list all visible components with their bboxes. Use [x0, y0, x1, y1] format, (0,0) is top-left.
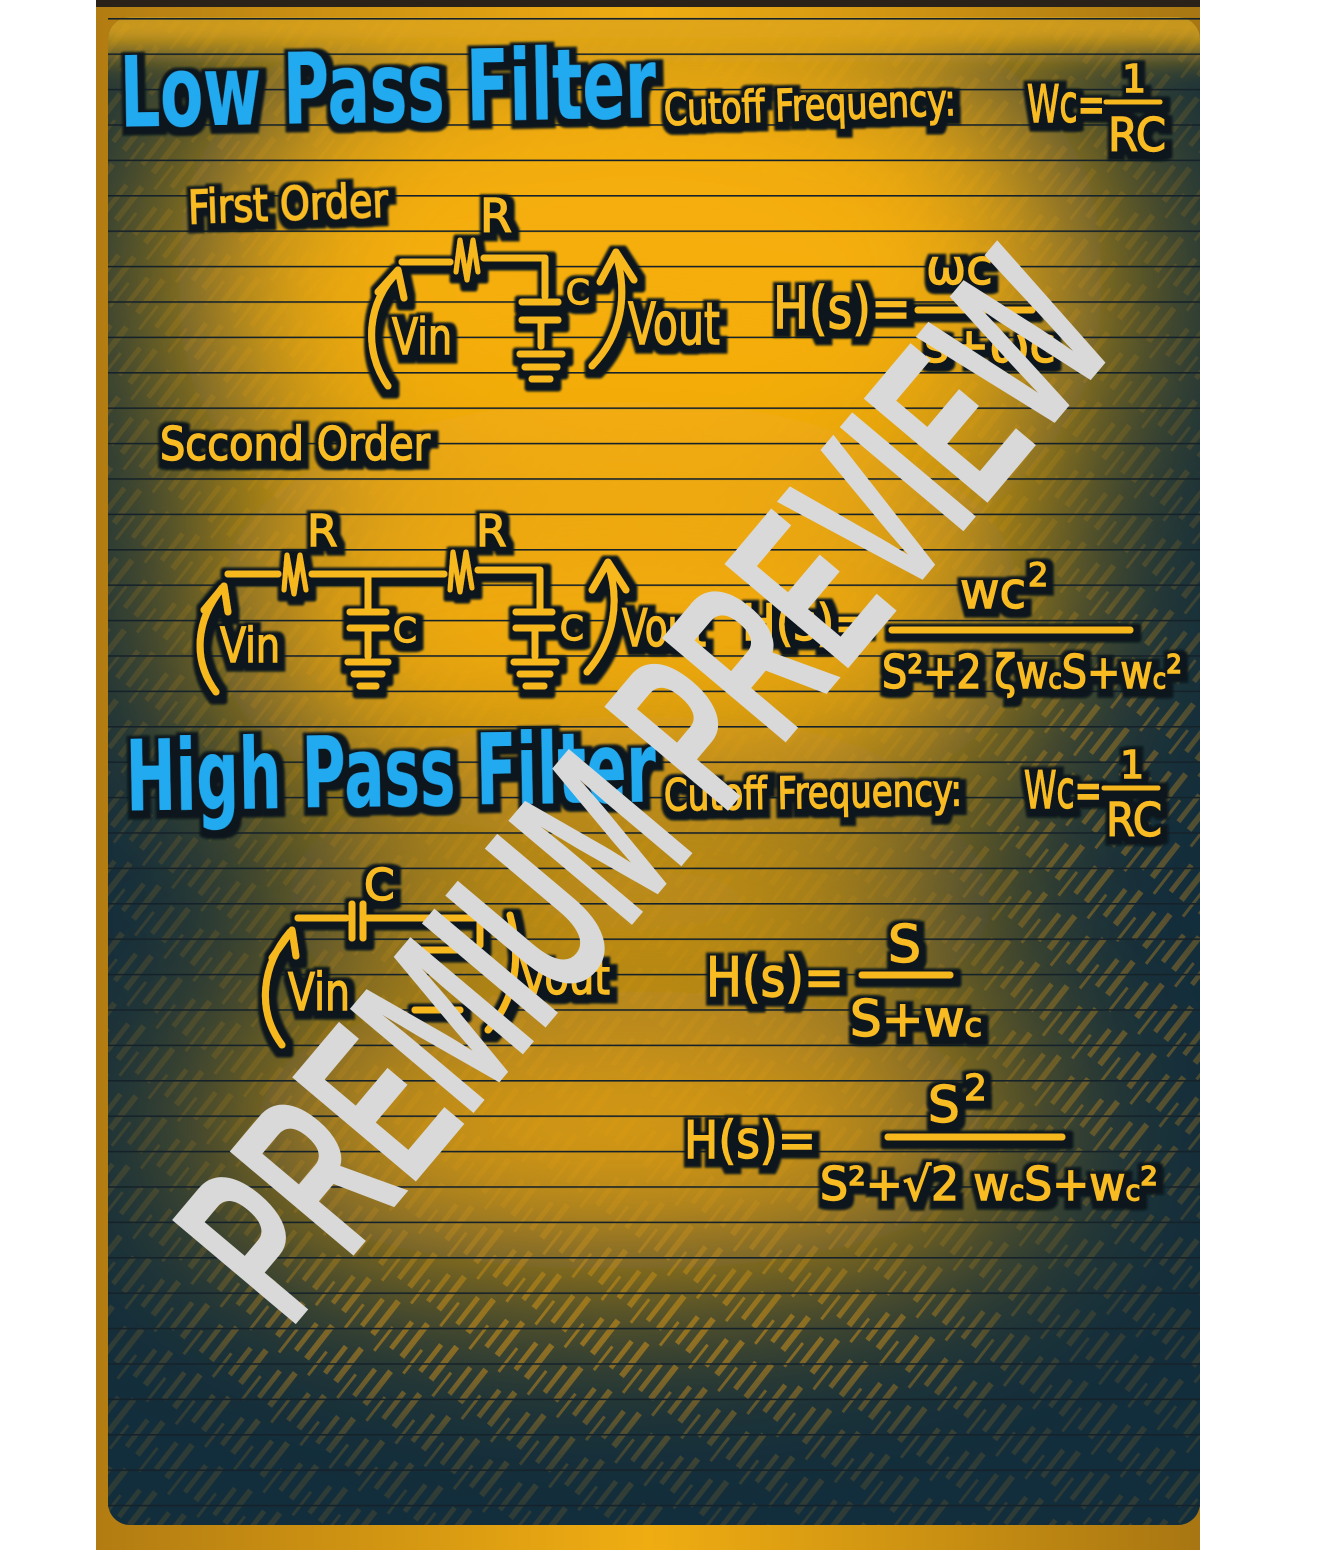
transfer function: first order low pass: H(s)= [773, 274, 911, 342]
cutoff frequency formula: high pass [664, 743, 1162, 847]
cutoff frequency formula: high pass: Wc= [1024, 761, 1102, 821]
transfer function: second order low pass: 2 [1028, 556, 1048, 594]
transfer function: first order low pass [773, 240, 1056, 374]
transfer function: second order high pass: H(s)= [684, 1111, 816, 1171]
circuit: second order low pass: R [307, 506, 338, 557]
cutoff frequency formula: low pass: RC [1108, 108, 1166, 162]
transfer function: first order low pass: s+ωc [924, 318, 1056, 374]
circuit: first order low pass: Vout [628, 290, 720, 358]
circuit: first order low pass: R [480, 189, 512, 243]
transfer function: second order low pass: H(s)= [742, 594, 872, 652]
transfer function: second order high pass [684, 1068, 1158, 1211]
circuit: first order low pass [372, 189, 720, 386]
transfer function: second order low pass: S²+2 ζwcS+wc² [882, 645, 1182, 699]
transfer function: second order high pass: S²+√2 wcS+wc² [820, 1157, 1158, 1211]
cutoff frequency formula: low pass [663, 57, 1166, 162]
subheading: second order: Sccond Order [160, 417, 430, 471]
circuit: first order low pass: C [566, 273, 590, 313]
cutoff frequency formula: high pass: RC [1106, 793, 1162, 847]
circuit: high pass: Vin [288, 963, 350, 1023]
transfer function: first order high pass: S [888, 915, 921, 975]
cutoff frequency formula: low pass: Cutoff Frequency: [663, 75, 957, 136]
circuit: second order low pass [200, 506, 706, 692]
cutoff frequency formula: low pass: 1 [1122, 57, 1146, 101]
circuit: second order low pass: R [476, 506, 507, 557]
circuit: second order low pass: Vout [622, 599, 706, 659]
circuit: high pass: Vout [520, 950, 610, 1006]
subheading: first order: First Order [187, 174, 389, 234]
transfer function: second order high pass: 2 [964, 1068, 987, 1109]
transfer function: first order high pass: H(s)= [706, 946, 844, 1009]
circuit: second order low pass: C [393, 611, 417, 651]
heading: high pass filter: High Pass Filter [125, 711, 657, 835]
cutoff frequency formula: high pass: 1 [1120, 743, 1144, 787]
circuit: second order low pass: Vin [220, 618, 280, 674]
circuit: second order low pass: C [560, 609, 584, 649]
cutoff frequency formula: low pass: Wc= [1027, 75, 1105, 135]
transfer function: second order high pass: S [928, 1076, 960, 1134]
transfer function: first order low pass: ωc [926, 240, 993, 296]
cutoff frequency formula: high pass: Cutoff Frequency: [664, 765, 962, 822]
transfer function: second order low pass [742, 556, 1182, 699]
transfer function: second order low pass: wc [960, 562, 1026, 620]
transfer function: first order high pass [706, 915, 982, 1048]
heading: low pass filter: Low Pass Filter [119, 27, 657, 151]
circuit: high pass: C [364, 860, 395, 911]
circuit: first order low pass: Vin [392, 308, 452, 366]
transfer function: first order high pass: S+wc [850, 990, 982, 1048]
circuit: high pass [265, 860, 610, 1045]
